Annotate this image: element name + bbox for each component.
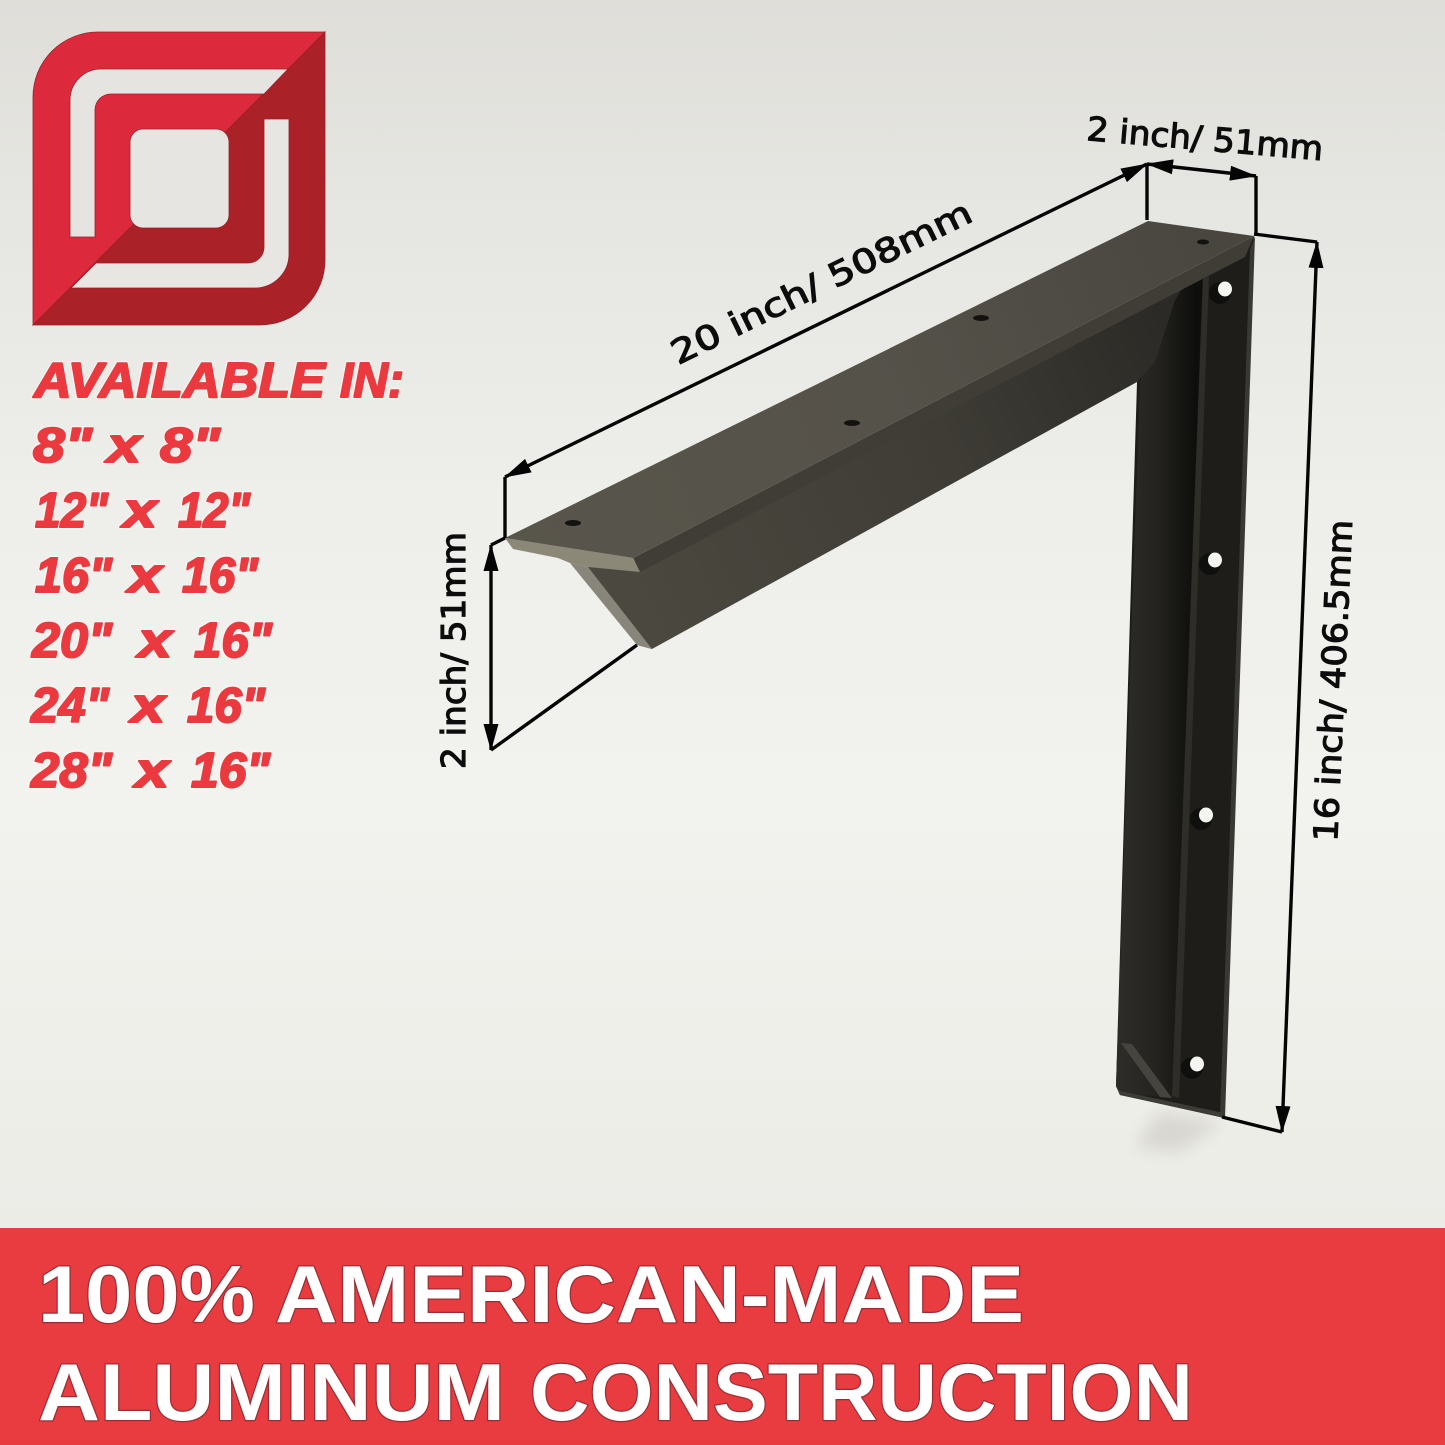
banner line 2: CONSTRUCTION	[530, 1348, 1193, 1438]
size: 28 x 16: 28"	[30, 744, 113, 798]
size: 20 x 16: x	[134, 614, 174, 668]
logo	[33, 32, 325, 325]
size: 28 x 16: 16"	[191, 744, 271, 798]
size: 20 x 16: 16"	[194, 614, 273, 668]
size: 20 x 16: 20"	[31, 614, 113, 668]
size: 24 x 16: 16"	[187, 679, 266, 733]
bracket product image	[505, 221, 1255, 1152]
arrow: 20 inch length	[505, 164, 1147, 477]
extension lines	[491, 164, 1317, 1132]
size: 28 x 16	[30, 744, 271, 798]
floor shadow	[1135, 1112, 1223, 1152]
size: 16 x 16	[35, 549, 259, 603]
banner line 1: 100%	[38, 1250, 255, 1340]
banner line 2	[38, 1348, 1193, 1438]
heading: available in: IN:	[340, 354, 404, 408]
size: 12 x 12: 12"	[35, 484, 109, 538]
vertical arm	[1116, 236, 1255, 1118]
dimension lines	[491, 164, 1317, 1132]
size: 12 x 12: x	[119, 484, 159, 538]
flange end face	[505, 538, 640, 572]
banner background	[0, 1228, 1445, 1445]
top holes	[565, 240, 1209, 526]
mounting holes	[1181, 282, 1232, 1079]
size: 8 x 8: x	[103, 419, 143, 473]
size: 24 x 16	[30, 679, 266, 733]
label: 20 inch: 20 inch/ 508mm	[664, 192, 978, 372]
arrow: 16 inch height	[1282, 242, 1317, 1132]
size: 16 x 16: x	[124, 549, 164, 603]
size: 12 x 12	[35, 484, 251, 538]
banner line 2: ALUMINUM	[38, 1348, 505, 1438]
size: 8 x 8: 8"	[33, 419, 93, 473]
text block: available sizes	[30, 354, 404, 798]
top face	[505, 221, 1254, 558]
size: 24 x 16: x	[127, 679, 167, 733]
label: 16 inch: 16 inch/ 406.5mm	[1306, 519, 1360, 842]
size: 8 x 8: 8"	[160, 419, 221, 473]
size: 16 x 16: 16"	[182, 549, 259, 603]
web end face	[570, 563, 652, 649]
arrow: 2 inch width	[1147, 164, 1256, 176]
label: 2 inch top: 2 inch/ 51mm	[1085, 109, 1325, 168]
banner line 1: AMERICAN-MADE	[275, 1250, 1024, 1340]
front lip band	[633, 236, 1254, 572]
arrow: 2 inch depth	[489, 545, 493, 750]
label: 2 inch left: 2 inch/ 51mm	[434, 532, 473, 769]
heading: available in: AVAILABLE	[33, 354, 326, 408]
size: 24 x 16: 24"	[30, 679, 110, 733]
size: 16 x 16: 16"	[35, 549, 113, 603]
size: 20 x 16	[31, 614, 273, 668]
horizontal web	[588, 276, 1190, 649]
size: 12 x 12: 12"	[178, 484, 251, 538]
size: 28 x 16: x	[131, 744, 171, 798]
banner	[0, 1228, 1445, 1445]
size: 8 x 8	[33, 419, 221, 473]
